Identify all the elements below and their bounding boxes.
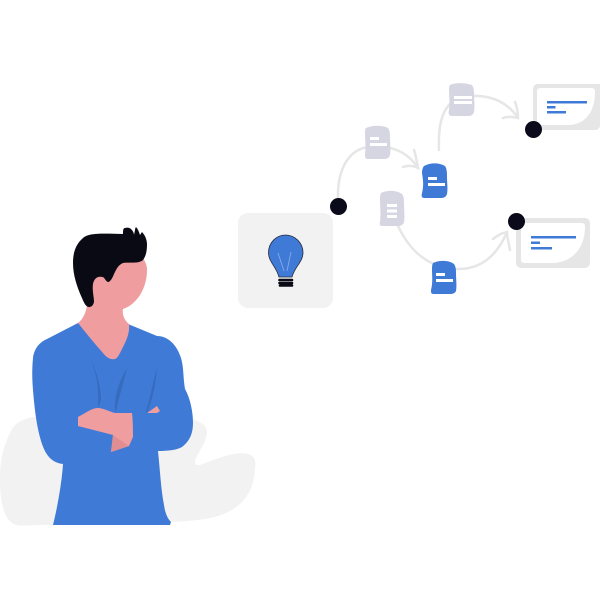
node: bottom panel dot: [508, 213, 525, 230]
arrow: lower document to bottom panel: [398, 226, 510, 269]
node: start dot: [330, 198, 347, 215]
document: blue lower: [431, 261, 456, 294]
shirt folds: [91, 360, 157, 413]
person: [32, 227, 193, 525]
background blob: [0, 417, 255, 526]
arm: hand far: [147, 406, 160, 413]
hair: [73, 227, 147, 307]
document: blue upper: [422, 163, 447, 198]
panel: bottom result: [516, 218, 590, 268]
document: gray top: [449, 83, 474, 116]
arrow: blue document to top panel: [439, 96, 518, 150]
card: lightbulb idea: [238, 213, 333, 308]
panel: top result: [533, 84, 600, 130]
document: gray lower: [380, 191, 404, 226]
icon: lightbulb: [268, 235, 303, 286]
node: top panel dot: [525, 121, 542, 138]
skin: face and neck: [78, 258, 147, 359]
arm: wrist shadow: [111, 435, 129, 452]
arm: forearm: [78, 408, 133, 452]
document: gray middle: [365, 126, 390, 159]
arrow: start to first blue document: [338, 146, 418, 200]
shirt: [32, 320, 193, 525]
